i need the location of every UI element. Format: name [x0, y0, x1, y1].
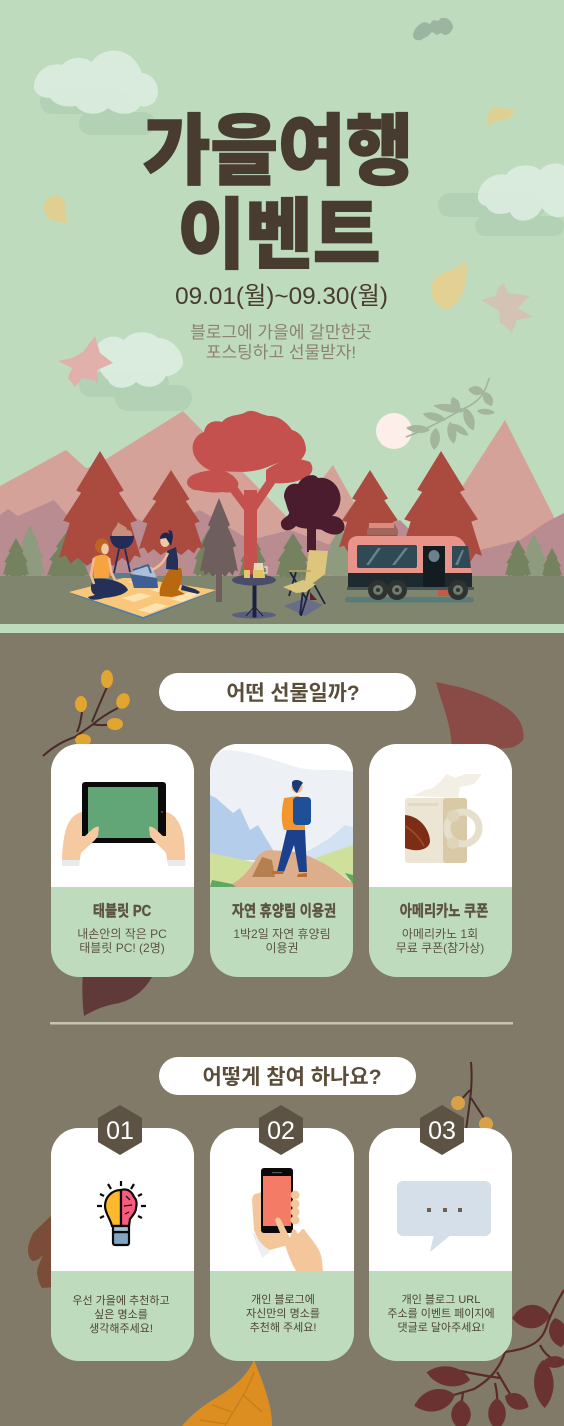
card: forest retreat voucher: 자연 휴양림 이용권 [232, 902, 336, 920]
decor: dark branch bottom right [412, 1290, 564, 1426]
title: 가을여행 [143, 108, 413, 194]
camper van [345, 523, 474, 602]
step card 01: 우선 가을에 추천하고 [72, 1293, 170, 1307]
green tree near chair [276, 533, 310, 579]
illustration: hiker [210, 744, 353, 887]
badge 02: 02 [267, 1117, 295, 1145]
step card 03 [369, 1105, 512, 1361]
step card 02: 자신만의 명소를 [246, 1307, 320, 1320]
card: americano coupon [369, 744, 512, 977]
icon: pale maple leaf [481, 283, 533, 333]
red tree [187, 411, 312, 585]
card: forest retreat voucher: 이용권 [265, 941, 299, 955]
decor: berries top right [451, 1062, 493, 1131]
heading pill: gifts: 어떤 선물일까? [226, 682, 360, 705]
decor: orange leaf bottom [182, 1360, 272, 1426]
red fir trees [59, 451, 482, 567]
heading pill: how to join: 어떻게 참여 하나요? [202, 1066, 382, 1089]
cloud: right [438, 163, 564, 236]
ground [0, 576, 564, 624]
card: americano coupon: 무료 쿠폰(참가상) [396, 941, 484, 955]
badge 01: 01 [106, 1117, 134, 1145]
heading pill: how to join [159, 1057, 416, 1095]
step card 03: 개인 블로그 URL [402, 1293, 480, 1306]
leafy branch [406, 378, 496, 450]
subtitle: 포스팅하고 선물받자! [206, 343, 356, 362]
card: tablet PC [51, 744, 194, 977]
woman kneeling [152, 530, 200, 597]
title: 이벤트 [178, 192, 380, 278]
icon: feather leaf top [413, 18, 453, 40]
mountains [0, 411, 564, 580]
cooler [130, 565, 158, 588]
decor: red leaf top right [436, 682, 524, 752]
decor: dark leaf under first card [82, 970, 155, 1016]
subtitle: 블로그에 가을에 갈만한곳 [190, 323, 372, 342]
badge 03 [420, 1105, 464, 1155]
step card 02: 추천해 주세요! [250, 1320, 316, 1334]
date range: 09.01(월)~09.30(월) [175, 283, 388, 310]
card: forest retreat voucher: 1박2일 자연 휴양림 [233, 927, 331, 941]
grey fir tree [200, 498, 238, 602]
icon: yellow leaf left [44, 195, 68, 223]
step card 01: 생각해주세요! [89, 1321, 153, 1335]
cloud: upper left [34, 51, 158, 135]
step card 01 [51, 1105, 194, 1361]
icon: speech bubble [397, 1181, 491, 1252]
step card 03: 주소를 이벤트 페이지에 [387, 1307, 495, 1320]
icon: pink maple leaf [58, 336, 113, 387]
card: forest retreat voucher [210, 744, 353, 977]
icon: tablet in hands [62, 782, 186, 866]
badge 03: 03 [428, 1117, 456, 1145]
decor: berry branch [43, 670, 132, 756]
grey tree trunk over ground [216, 576, 222, 602]
panel: lower background [0, 633, 564, 1426]
cloud: lower left [79, 332, 192, 411]
badge 01 [98, 1105, 142, 1155]
badge 02 [259, 1105, 303, 1155]
subtitle [190, 323, 372, 362]
card: americano coupon: 아메리카노 쿠폰 [400, 902, 488, 920]
step card 02: 개인 블로그에 [251, 1293, 315, 1306]
decor: left leaf [28, 1212, 55, 1288]
card: tablet PC: 태블릿 PC! (2명) [79, 941, 165, 955]
panel: hero background [0, 0, 564, 633]
grill [110, 522, 134, 578]
step card 01: 싶은 명소를 [94, 1308, 148, 1321]
step card 03: 댓글로 달아주세요! [397, 1321, 485, 1334]
title [143, 108, 413, 278]
card: tablet PC: 태블릿 PC [93, 902, 151, 920]
icon: large yellow leaf [431, 260, 466, 309]
card: americano coupon: 아메리카노 1회 [402, 927, 478, 941]
heading pill: gifts [159, 673, 416, 711]
icon: phone in hand [252, 1168, 323, 1271]
moon [376, 413, 412, 449]
icon: yellow leaf right [487, 107, 515, 127]
dark tree [281, 475, 344, 552]
camping chair [283, 550, 328, 616]
icon: coffee mug [405, 774, 482, 863]
woman seated [88, 538, 128, 600]
card: tablet PC: 내손안의 작은 PC [77, 927, 167, 941]
small background trees [3, 525, 562, 580]
step card 02 [210, 1105, 354, 1361]
icon: brain bulb [97, 1181, 146, 1245]
picnic blanket [69, 577, 216, 619]
table with drinks [232, 563, 276, 618]
